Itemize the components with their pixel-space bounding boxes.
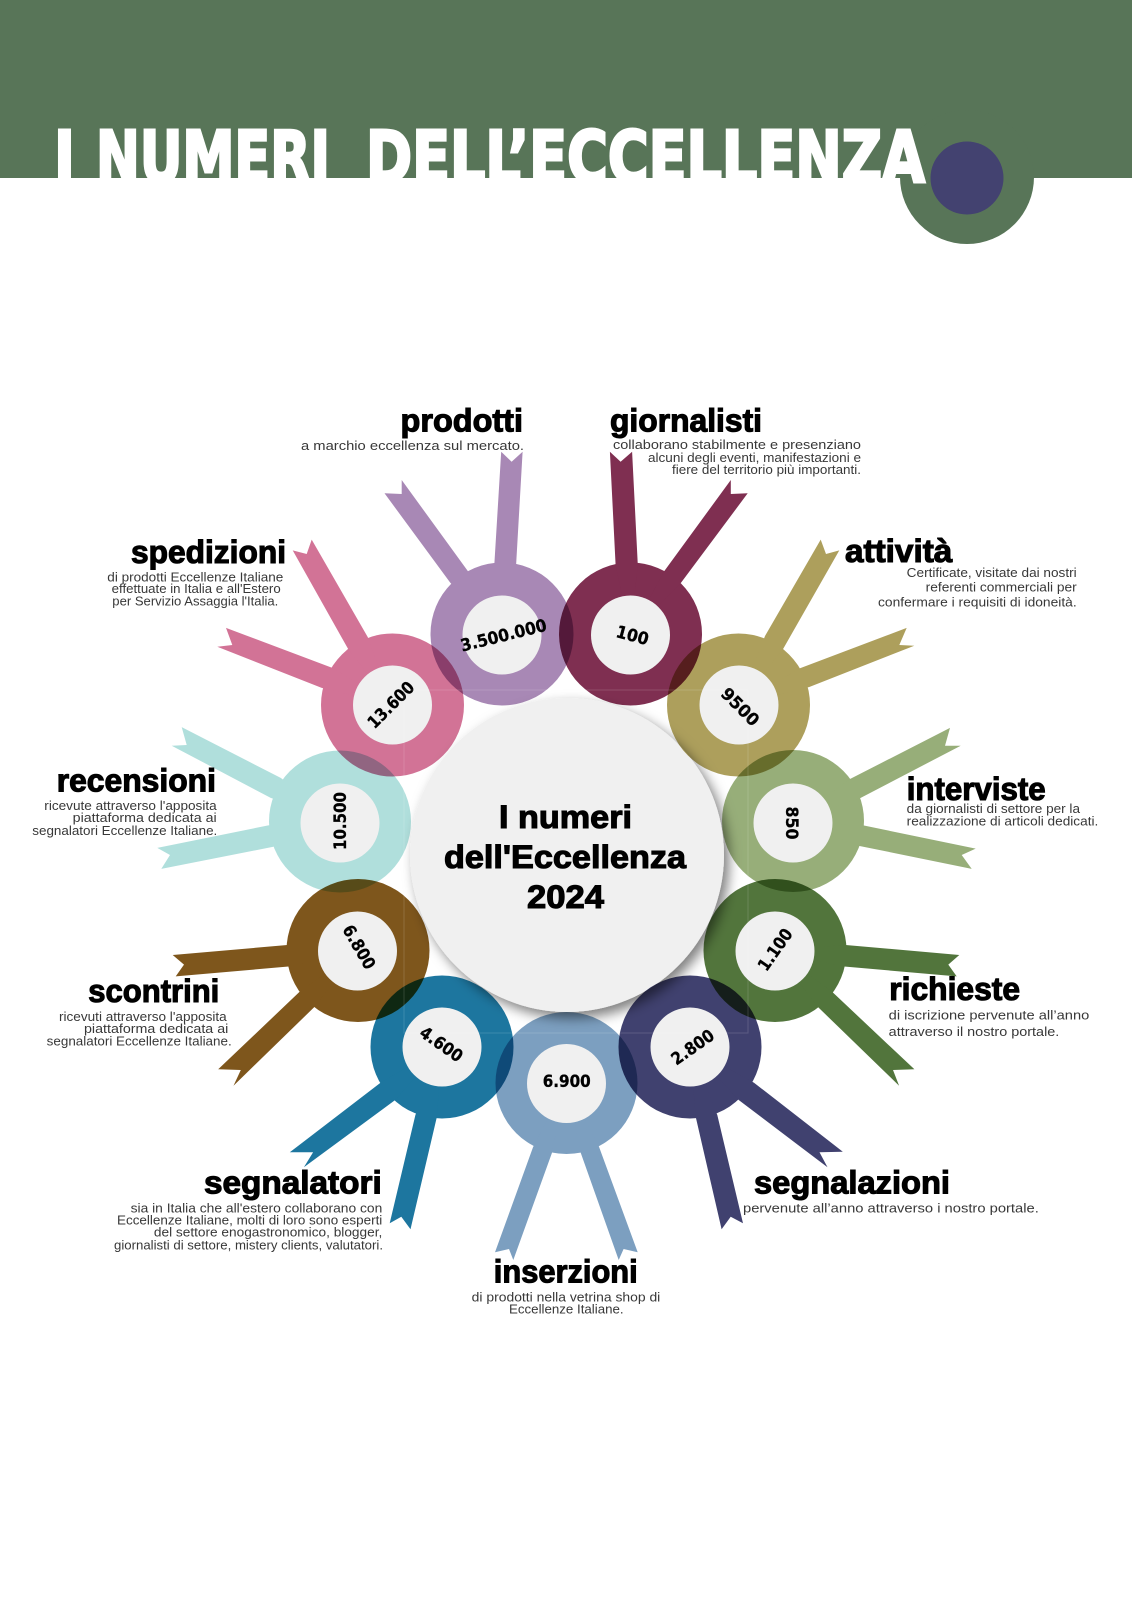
label: giornalisti: fiere del territorio più importanti. — [672, 462, 861, 477]
label: scontrini: segnalatori Eccellenze Italiane. — [47, 1034, 232, 1049]
label: richieste: richieste — [889, 971, 1020, 1007]
label: richieste — [889, 971, 1089, 1039]
label: inserzioni: Eccellenze Italiane. — [509, 1301, 624, 1316]
rosette: inserzioni: 6.900 — [543, 1072, 591, 1092]
rosette: segnalazioni — [618, 976, 843, 1229]
rosette: scontrini — [173, 879, 429, 1086]
label: segnalazioni: segnalazioni — [754, 1164, 950, 1200]
label: recensioni — [32, 762, 217, 838]
label: giornalisti: giornalisti — [610, 403, 762, 439]
label: recensioni: piattaforma dedicata ai — [73, 810, 217, 825]
label: interviste: realizzazione di articoli dedicati. — [907, 813, 1098, 828]
label: recensioni: ricevute attraverso l'apposita — [44, 798, 217, 813]
header decoration: green circle — [900, 110, 1034, 244]
rosette: spedizioni — [217, 540, 464, 776]
rosette: prodotti: 3.500.000 — [459, 616, 549, 656]
title: I — [54, 116, 75, 199]
label: inserzioni: di prodotti nella vetrina shop di — [472, 1290, 660, 1305]
central circle — [410, 698, 724, 1012]
rosette: segnalatori — [290, 976, 514, 1229]
label: attività — [845, 533, 1077, 609]
header decoration: indigo circle — [930, 142, 1004, 214]
label: spedizioni: spedizioni — [131, 534, 286, 570]
rosette: attività — [667, 540, 914, 776]
label: segnalatori: giornalisti di settore, mistery clients, valutatori. — [114, 1237, 383, 1252]
label: scontrini: scontrini — [88, 973, 219, 1009]
label: interviste: interviste — [907, 771, 1046, 807]
label: recensioni: recensioni — [57, 762, 216, 798]
label: spedizioni: di prodotti Eccellenze Italiane — [107, 569, 283, 584]
rosette: recensioni: 10.500 — [331, 792, 351, 850]
title: DELL’ECCELLENZA — [366, 116, 925, 199]
label: richieste: attraverso il nostro portale. — [889, 1024, 1059, 1039]
label: spedizioni: effettuate in Italia e all'Estero — [112, 581, 281, 596]
rosette: richieste — [704, 879, 959, 1086]
rosette: interviste — [722, 728, 976, 892]
rosette: segnalazioni: 2.800 — [668, 1026, 719, 1070]
label: prodotti: a marchio eccellenza sul mercato. — [301, 438, 524, 453]
label: attività: Certificate, visitate dai nostri — [907, 565, 1077, 580]
rosette: inserzioni — [495, 1012, 638, 1260]
label: richieste: di iscrizione pervenute all’anno — [889, 1007, 1089, 1022]
label: segnalatori: Eccellenze Italiane, molti di loro sono esperti — [117, 1212, 382, 1227]
rosette: richieste: 1.100 — [754, 925, 798, 975]
title: NUMERI — [96, 116, 330, 199]
label: inserzioni — [472, 1254, 660, 1316]
rosette: scontrini: 6.800 — [338, 922, 379, 973]
label: attività: confermare i requisiti di idoneità. — [878, 594, 1077, 609]
central title: I numeri — [499, 799, 632, 835]
label: spedizioni — [107, 534, 286, 609]
label: scontrini — [47, 973, 232, 1049]
rosette: prodotti — [384, 452, 574, 706]
rosette: recensioni — [157, 727, 411, 892]
header band — [0, 0, 1132, 178]
rosette: giornalisti: 100 — [614, 622, 651, 650]
central title: 2024 — [527, 879, 604, 915]
central title — [444, 799, 686, 915]
label: recensioni: segnalatori Eccellenze Italiane. — [32, 823, 217, 838]
rosette: segnalatori: 4.600 — [415, 1023, 466, 1067]
label: giornalisti — [610, 403, 861, 477]
label: prodotti: prodotti — [400, 403, 523, 439]
label: scontrini: piattaforma dedicata ai — [84, 1021, 228, 1036]
label: attività: attività — [845, 533, 953, 569]
rosette: giornalisti — [559, 452, 748, 706]
label: interviste — [907, 771, 1098, 828]
central title: dell'Eccellenza — [444, 839, 686, 875]
label: interviste: da giornalisti di settore per la — [907, 801, 1081, 816]
label: scontrini: ricevuti attraverso l'apposita — [59, 1009, 227, 1024]
label: segnalatori: segnalatori — [204, 1164, 382, 1200]
rosette: interviste: 850 — [781, 806, 801, 840]
label: segnalazioni — [743, 1164, 1039, 1215]
label: spedizioni: per Servizio Assaggia l'Italia. — [112, 594, 278, 609]
label: attività: referenti commerciali per — [926, 579, 1077, 594]
rosette: attività: 9500 — [716, 684, 763, 731]
label: giornalisti: alcuni degli eventi, manifestazioni e — [648, 450, 861, 465]
label: inserzioni: inserzioni — [494, 1254, 638, 1290]
rosette: spedizioni: 13.600 — [364, 678, 419, 733]
title — [54, 116, 925, 199]
label: segnalatori — [114, 1164, 383, 1252]
label: giornalisti: collaborano stabilmente e presenziano — [613, 437, 861, 452]
label: segnalazioni: pervenute all’anno attraverso i nostro portale. — [743, 1200, 1039, 1215]
label: segnalatori: del settore enogastronomico, blogger, — [154, 1225, 382, 1240]
label: segnalatori: sia in Italia che all'estero collaborano con — [131, 1200, 382, 1215]
label: prodotti — [301, 403, 524, 453]
